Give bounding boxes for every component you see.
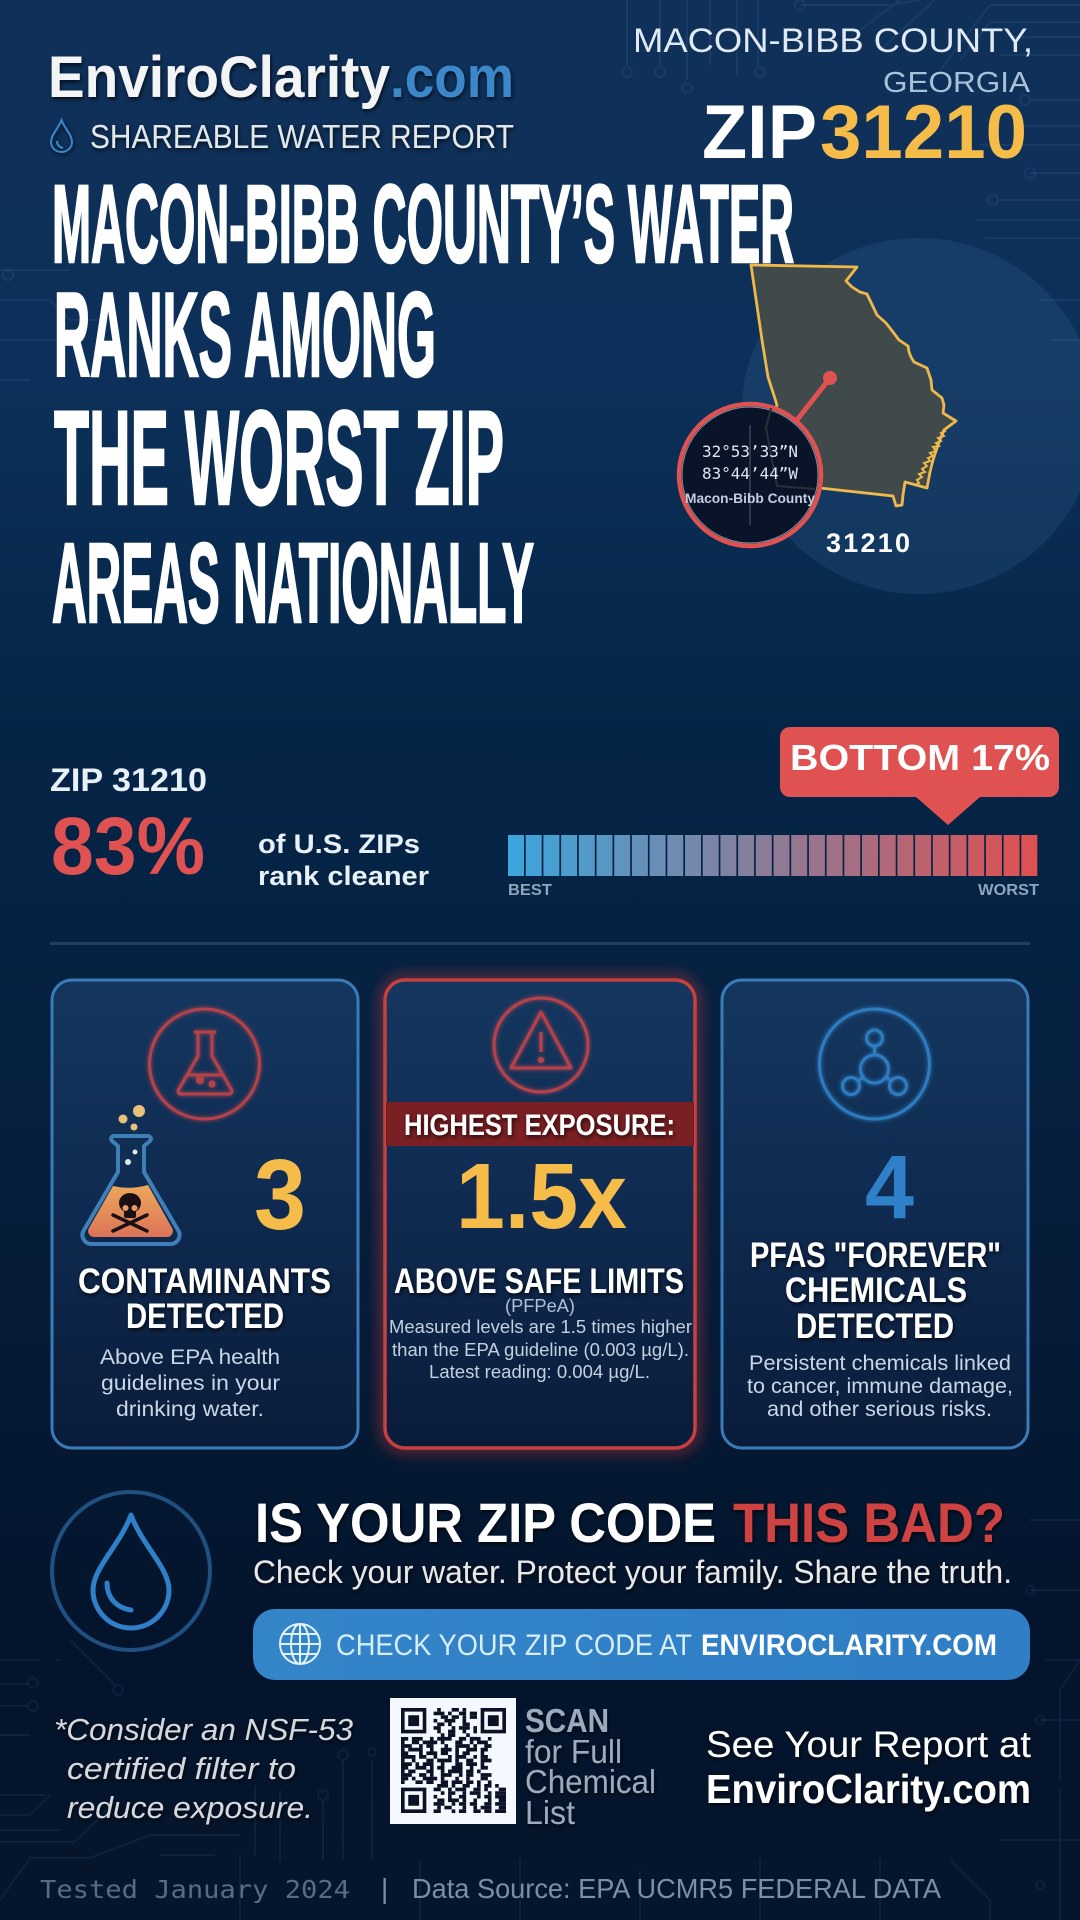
state outline <box>751 265 956 506</box>
card heading: DETECTED <box>796 1307 954 1346</box>
coordinates magnifier: 83°44’44”W <box>702 464 798 483</box>
test date: Tested January 2024 <box>40 1875 350 1904</box>
filter note: certified filter to <box>67 1751 296 1786</box>
logo wordmark: EnviroClarity <box>48 45 390 110</box>
icon: globe <box>280 1624 320 1664</box>
panel: contaminants <box>52 980 358 1448</box>
icon: water drop circle <box>52 1492 210 1650</box>
background circuit pattern <box>0 0 1080 380</box>
stat caption: of U.S. ZIPs <box>258 829 420 859</box>
zip code <box>702 90 1027 175</box>
card description <box>100 1346 280 1421</box>
main title: THE WORST ZIP <box>54 384 504 533</box>
big number 1.5x: 1.5x <box>456 1144 627 1248</box>
location pointer <box>797 371 837 420</box>
cta subheading: Check your water. Protect your family. Share the truth. <box>253 1554 1012 1590</box>
card description: and other serious risks. <box>767 1398 992 1421</box>
bar label best: BEST <box>508 882 552 899</box>
footer <box>40 1873 941 1904</box>
scan label: for Full <box>525 1733 622 1770</box>
percent stat: 83% <box>51 801 205 892</box>
data source: Data Source: EPA UCMR5 FEDERAL DATA <box>412 1873 941 1904</box>
zip code: ZIP <box>702 90 817 175</box>
cta heading: IS YOUR ZIP CODE <box>255 1491 716 1554</box>
card heading: CONTAMINANTS <box>78 1262 331 1301</box>
card description: guidelines in your <box>101 1372 280 1395</box>
scan label: SCAN <box>525 1702 609 1739</box>
card description: Measured levels are 1.5 times higher <box>389 1317 692 1337</box>
filter note: *Consider an NSF-53 <box>54 1712 353 1747</box>
coordinates magnifier <box>679 404 821 546</box>
panel: pfas <box>722 980 1028 1448</box>
scan label: List <box>525 1794 575 1831</box>
state name: GEORGIA <box>883 67 1031 99</box>
report link <box>706 1724 1032 1812</box>
card description <box>389 1317 692 1382</box>
icon: water drop <box>51 120 72 152</box>
filter note <box>54 1712 353 1825</box>
cta button <box>253 1609 1030 1680</box>
card heading: DETECTED <box>126 1297 284 1336</box>
card description: Above EPA health <box>100 1346 280 1369</box>
cta heading <box>255 1491 1005 1554</box>
cta button: CHECK YOUR ZIP CODE AT <box>336 1629 692 1662</box>
stat caption: rank cleaner <box>258 861 430 891</box>
icon: warning circle <box>494 998 588 1092</box>
card description: drinking water. <box>116 1398 264 1421</box>
big number 3: 3 <box>254 1139 306 1251</box>
exposure banner <box>386 1102 694 1146</box>
cta heading: THIS BAD? <box>733 1491 1005 1554</box>
georgia map <box>679 238 1080 594</box>
chemical name: (PFPeA) <box>505 1296 575 1316</box>
stat caption <box>258 829 430 891</box>
card heading <box>750 1236 1001 1346</box>
coordinates magnifier: Macon-Bibb County <box>685 491 815 506</box>
report subtitle: SHAREABLE WATER REPORT <box>90 118 514 155</box>
coordinates magnifier: 32°53’33”N <box>702 442 798 461</box>
panel: highest exposure <box>385 980 695 1448</box>
percentile bar <box>508 835 1039 876</box>
exposure banner: HIGHEST EXPOSURE: <box>404 1109 675 1142</box>
separator: | <box>381 1873 388 1904</box>
callout: bottom 17%: BOTTOM 17% <box>790 737 1050 778</box>
scan label <box>525 1702 656 1831</box>
header logo <box>48 45 514 155</box>
zip code: 31210 <box>820 90 1027 175</box>
card description: Persistent chemicals linked <box>749 1352 1011 1375</box>
icon: toxic flask <box>82 1105 180 1244</box>
ranking section <box>50 727 1059 899</box>
scan label: Chemical <box>525 1763 656 1800</box>
qr code <box>390 1698 516 1824</box>
report link: See Your Report at <box>706 1724 1032 1765</box>
map zip label: 31210 <box>826 528 910 558</box>
card heading: CHEMICALS <box>785 1271 967 1310</box>
county name: MACON-BIBB COUNTY, <box>633 22 1033 60</box>
icon: molecule circle <box>820 1009 930 1119</box>
card heading: ABOVE SAFE LIMITS <box>394 1262 684 1301</box>
callout: bottom 17% <box>780 727 1059 825</box>
cta button: ENVIROCLARITY.COM <box>701 1629 997 1662</box>
card heading <box>78 1262 331 1336</box>
big number 4: 4 <box>865 1138 914 1238</box>
report link: EnviroClarity.com <box>706 1766 1031 1812</box>
logo wordmark: .com <box>390 45 514 110</box>
call to action <box>253 1491 1030 1680</box>
card description <box>747 1352 1013 1421</box>
card description: Latest reading: 0.004 µg/L. <box>429 1362 650 1382</box>
filter note: reduce exposure. <box>67 1790 313 1825</box>
icon: flask circle <box>150 1009 260 1119</box>
main title <box>52 163 794 646</box>
map backdrop disc <box>741 238 1080 594</box>
card heading: PFAS "FOREVER" <box>750 1236 1001 1275</box>
coastline detail <box>915 431 946 485</box>
location block <box>633 22 1033 175</box>
card description: than the EPA guideline (0.003 µg/L). <box>392 1340 689 1360</box>
card description: to cancer, immune damage, <box>747 1375 1013 1398</box>
zip label: ZIP 31210 <box>50 762 207 798</box>
main title: RANKS AMONG <box>54 268 436 402</box>
bar label worst: WORST <box>978 882 1039 899</box>
